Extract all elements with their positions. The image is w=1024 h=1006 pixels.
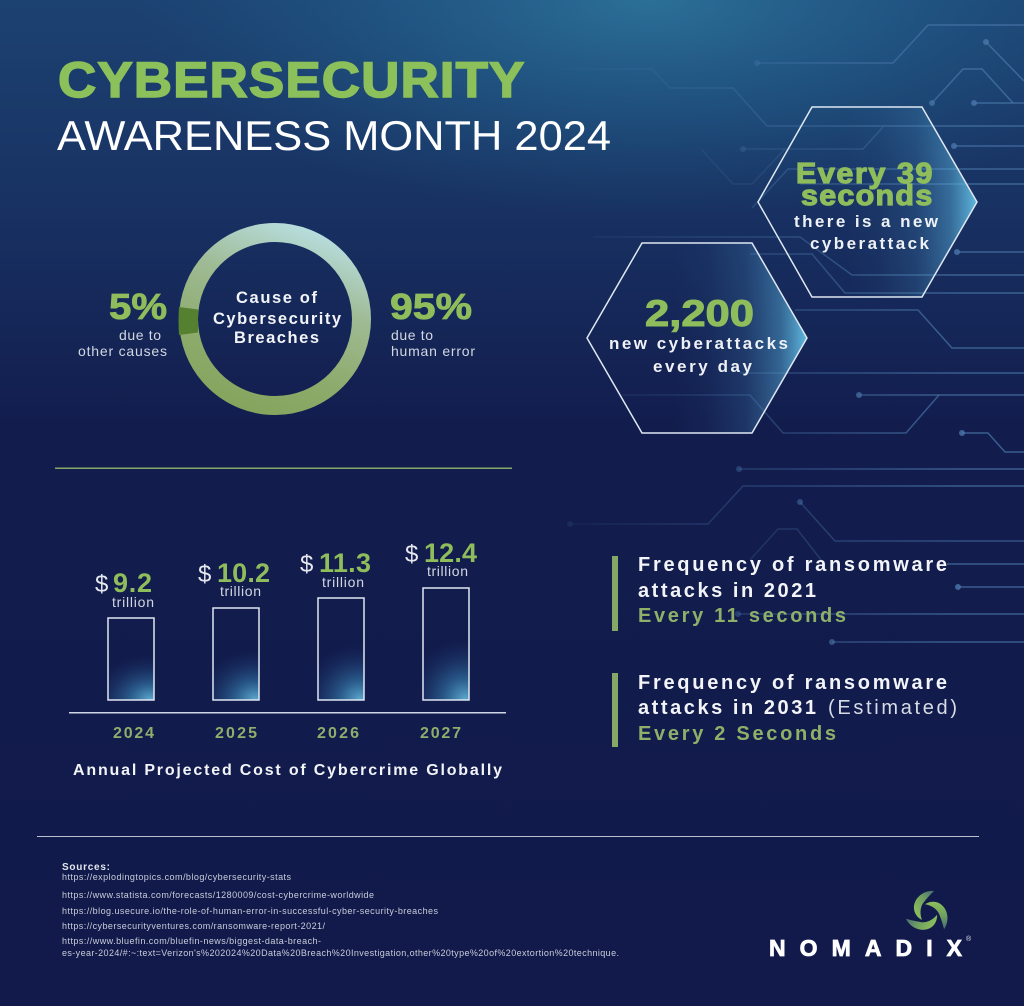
- bar chart: annual projected cost: [69, 538, 506, 779]
- bar 2024: 9.2: [113, 568, 152, 598]
- stat: 5% other causes: [78, 286, 167, 359]
- icon: swirl: [906, 891, 954, 936]
- bar 2026: trillion: [322, 574, 364, 590]
- callout: ransomware frequency 2031: Frequency of ransomware: [638, 672, 947, 694]
- callout: ransomware frequency 2021: [612, 554, 947, 631]
- hexagon: 2,200 cyberattacks: new cyberattacks: [609, 334, 788, 353]
- bar 2026: 11.3: [319, 548, 371, 578]
- sources: https://www.bluefin.com/bluefin-news/biggest-data-breach-: [62, 936, 321, 946]
- sources: [62, 862, 619, 958]
- logo: Nomadix: [769, 891, 972, 961]
- callout: ransomware frequency 2031: [612, 672, 957, 747]
- bar 2026: $: [300, 551, 313, 578]
- donut center label: [213, 289, 342, 347]
- donut center label: Cybersecurity: [213, 310, 342, 328]
- hexagon: every 39 seconds: Every 39: [796, 158, 932, 190]
- bar 2024: 2024: [113, 725, 154, 742]
- bar 2024: $: [95, 571, 108, 598]
- bar 2025: 2025: [215, 725, 257, 742]
- sources: https://www.statista.com/forecasts/1280009/cost-cybercrime-worldwide: [62, 890, 374, 900]
- hexagon: every 39 seconds: [758, 107, 977, 297]
- chart baseline: [69, 712, 506, 714]
- title: CYBERSECURITY: [58, 51, 524, 108]
- bar 2024: [95, 568, 154, 742]
- hexagon: every 39 seconds: cyberattack: [810, 234, 930, 253]
- sources: https://blog.usecure.io/the-role-of-human-error-in-successful-cyber-security-breaches: [62, 906, 439, 916]
- callout: ransomware frequency 2021: Every 11 seconds: [638, 605, 846, 627]
- hexagon: 2,200 cyberattacks: every day: [653, 357, 753, 376]
- footer divider: [37, 836, 979, 837]
- title: AWARENESS MONTH 2024: [57, 112, 611, 159]
- bar 2024: trillion: [112, 594, 154, 610]
- callout: ransomware frequency 2021: attacks in 2021: [638, 580, 816, 602]
- bar 2026: [300, 548, 371, 742]
- stat: 5% other causes: 5%: [109, 286, 167, 327]
- stat: 95% human error: 95%: [390, 286, 472, 327]
- section divider green: [55, 468, 512, 469]
- callout: ransomware frequency 2031: Every 2 Seconds: [638, 723, 836, 745]
- hexagon: 2,200 cyberattacks: 2,200: [645, 293, 754, 334]
- title: [57, 51, 611, 159]
- wordmark: NOMADIX: [769, 935, 963, 961]
- bar 2025: [198, 558, 270, 742]
- donut chart: [178, 232, 362, 406]
- sources: https://explodingtopics.com/blog/cybersecurity-stats: [62, 872, 292, 882]
- callout: ransomware frequency 2031: (Estimated): [828, 697, 957, 719]
- callout: ransomware frequency 2031: attacks in 2031: [638, 697, 816, 719]
- bar 2026: 2026: [317, 725, 359, 742]
- donut center label: Breaches: [234, 329, 319, 347]
- stat: 5% other causes: other causes: [78, 343, 167, 359]
- circuit board line pattern: [560, 25, 1024, 645]
- donut center label: Cause of: [236, 289, 318, 307]
- callout: ransomware frequency 2021: Frequency of ransomware: [638, 554, 947, 576]
- sources: https://cybersecurityventures.com/ransomware-report-2021/: [62, 921, 325, 931]
- bar 2027: 12.4: [424, 538, 477, 568]
- bar 2025: 10.2: [217, 558, 270, 588]
- bar 2027: $: [405, 541, 418, 568]
- stat: 95% human error: human error: [391, 343, 475, 359]
- sources: Sources:: [62, 862, 110, 873]
- bar 2027: trillion: [427, 563, 468, 579]
- stat: 5% other causes: due to: [119, 327, 161, 343]
- stat: 95% human error: due to: [391, 327, 433, 343]
- bar 2025: $: [198, 561, 211, 588]
- hexagon: every 39 seconds: there is a new: [794, 212, 939, 231]
- bar 2027: [405, 538, 477, 742]
- stat: 95% human error: [390, 286, 475, 359]
- bar 2027: 2027: [420, 725, 461, 742]
- hexagon: 2,200 cyberattacks: [587, 243, 807, 433]
- sources: es-year-2024/#:~:text=Verizon's%202024%20Data%20Breach%20Investigation,other%20type%20of%20extortion%20technique.: [62, 948, 619, 958]
- hexagon: every 39 seconds: seconds: [801, 180, 932, 212]
- panel: cause of breaches donut: [78, 232, 475, 406]
- logo: Nomadix: ®: [966, 935, 972, 943]
- bar 2025: trillion: [220, 583, 261, 599]
- chart caption: Annual Projected Cost of Cybercrime Globally: [73, 762, 502, 779]
